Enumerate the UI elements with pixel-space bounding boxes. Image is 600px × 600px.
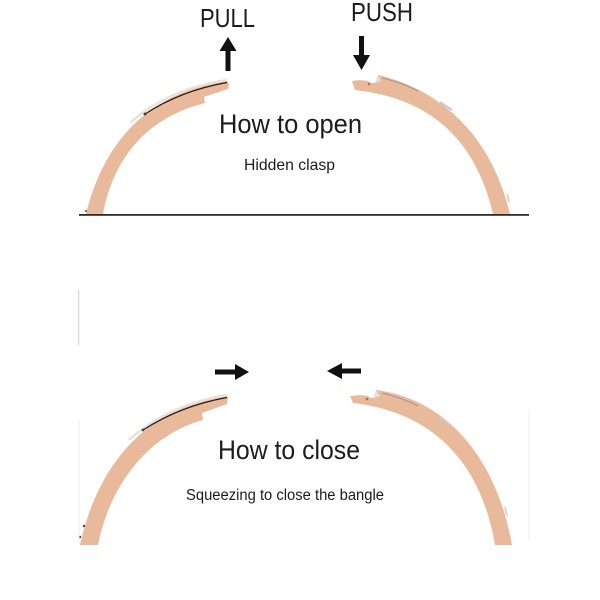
text: hidden clasp: Hidden clasp xyxy=(244,157,335,174)
bangle: left half, close state xyxy=(79,395,228,545)
arrow: squeeze left xyxy=(327,363,361,379)
bangle: right half, close state xyxy=(350,390,512,545)
arrow: pull up xyxy=(220,37,236,71)
heading: how to open: How to open xyxy=(219,109,362,139)
bangle: left half, open state xyxy=(85,80,229,214)
text: squeezing instruction: Squeezing to close the bangle xyxy=(186,487,384,504)
arrow: push down xyxy=(353,36,370,70)
heading: how to close: How to close xyxy=(218,435,360,465)
panel: how to close xyxy=(79,363,512,545)
panel: how to open xyxy=(85,0,510,214)
arrow: squeeze right xyxy=(215,364,249,380)
divider line xyxy=(79,214,529,216)
bangle: right half, open state xyxy=(352,75,510,214)
label: PULL: PULL xyxy=(200,3,255,33)
